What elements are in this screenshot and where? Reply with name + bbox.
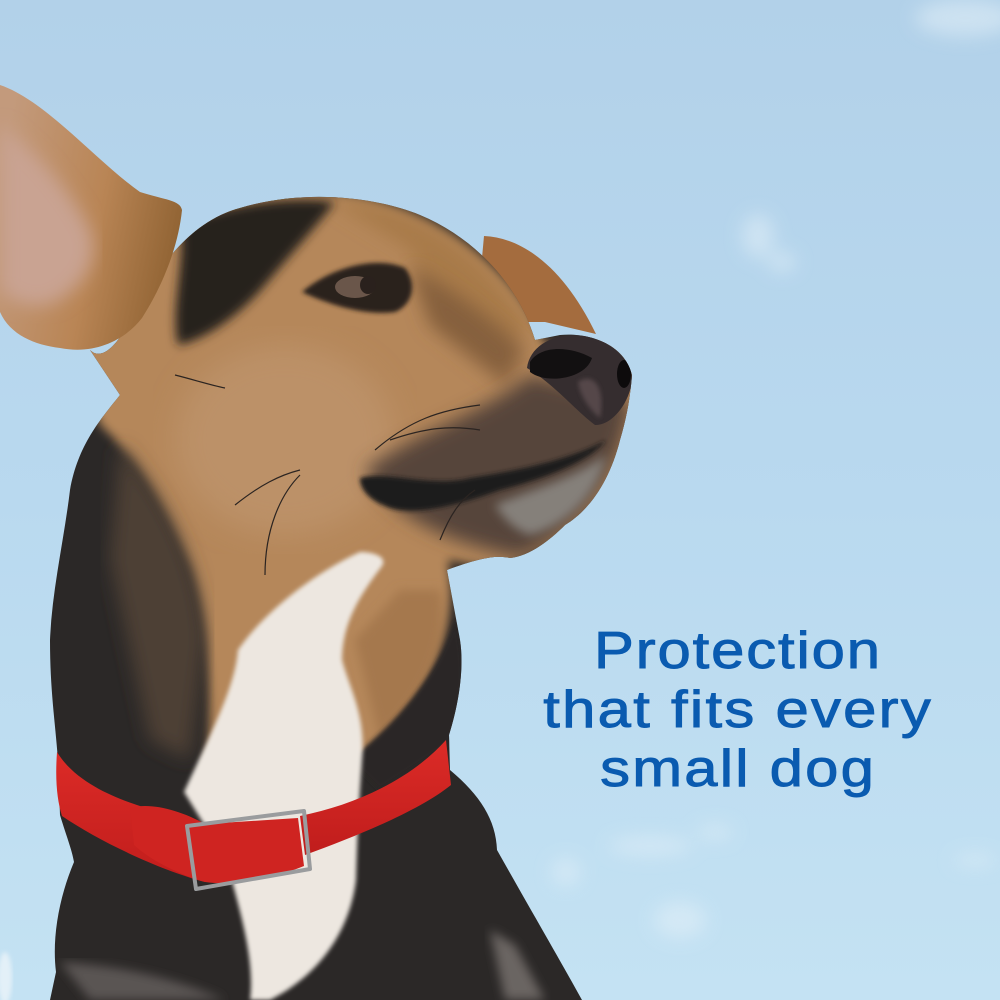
brow shadow bbox=[410, 265, 525, 385]
muzzle shading bbox=[365, 375, 630, 558]
whiskers bbox=[175, 375, 480, 575]
headline: Protection bbox=[594, 621, 880, 679]
dog bbox=[0, 85, 700, 1000]
collar keeper bbox=[130, 806, 304, 883]
clouds bbox=[552, 0, 1000, 938]
tan head and neck bbox=[90, 196, 632, 753]
base dark coat bbox=[50, 196, 632, 1000]
black right neck bbox=[360, 622, 462, 766]
headline: that fits every bbox=[543, 680, 931, 738]
shoulder grey highlights bbox=[60, 962, 225, 1000]
nose bbox=[527, 335, 632, 425]
headline bbox=[543, 621, 931, 797]
warm cheek highlight bbox=[175, 345, 395, 535]
dark fur mix at neck side bbox=[110, 445, 205, 760]
upper head shade bbox=[350, 200, 524, 336]
dog body and head fill bbox=[50, 196, 632, 1000]
right neck tan wedge shadow bbox=[355, 590, 442, 740]
eye bbox=[302, 263, 412, 313]
far ear bbox=[480, 236, 596, 334]
collar strap right bbox=[300, 740, 451, 855]
grey chin bbox=[495, 455, 606, 535]
inner ear bbox=[0, 125, 93, 306]
black forehead patch bbox=[176, 200, 335, 345]
collar strap left bbox=[56, 752, 210, 882]
white chest bbox=[184, 552, 383, 1000]
headline: small dog bbox=[600, 739, 874, 797]
buckle bbox=[187, 811, 310, 889]
red collar bbox=[56, 740, 451, 889]
cloud at lower left edge bbox=[0, 952, 12, 1000]
mouth bbox=[360, 440, 606, 511]
near ear bbox=[0, 85, 182, 350]
